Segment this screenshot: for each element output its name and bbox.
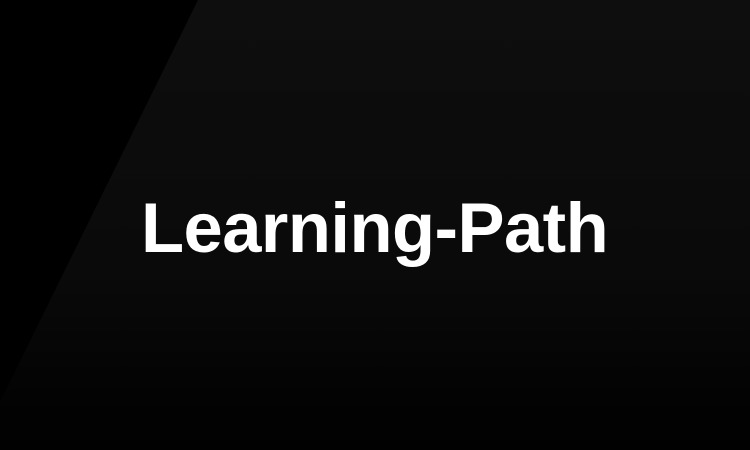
title: Learning-Path bbox=[141, 188, 608, 267]
